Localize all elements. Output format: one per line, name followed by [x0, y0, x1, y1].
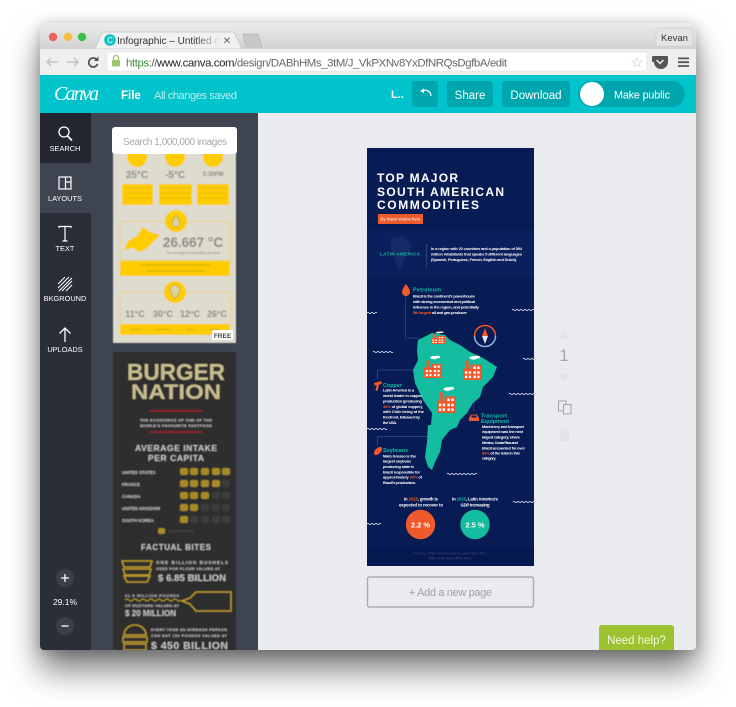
section: copper: the USA. [383, 420, 397, 425]
Latin America intro band [380, 236, 522, 270]
section: transport equipment: Equipment [481, 419, 509, 425]
author tag [378, 214, 423, 224]
section: transport equipment: Machinery and transport [482, 424, 525, 429]
template thumbnail: burger nation: EVERY YEAR AN AVERAGE PERSON [151, 628, 227, 632]
need help button: Need help? [607, 635, 666, 647]
poster title [377, 174, 504, 209]
add a new page button: + Add a new page [409, 587, 492, 599]
browser window [40, 23, 696, 650]
navigation icons [47, 56, 98, 67]
browser toolbar [46, 49, 689, 72]
section: transport equipment: Transport [481, 414, 507, 420]
icon: car [469, 414, 479, 421]
template thumbnail: burger nation: BURGER [127, 359, 225, 385]
section: transport equipment: Brazil accounted for over [482, 446, 525, 450]
map: South America [413, 333, 497, 470]
template thumbnail: burger nation: AVERAGE INTAKE [135, 443, 217, 453]
text tool [56, 226, 75, 253]
free badge: FREE [214, 333, 232, 340]
factory icons [424, 331, 482, 413]
template thumbnail: burger nation: NATION [131, 381, 221, 404]
user button: Kevan [661, 33, 688, 44]
section: transport equipment: 86% of the total in this [482, 450, 521, 456]
source footer: Source: http://www.source.com/404-4f4c- [413, 552, 489, 556]
region description [431, 246, 523, 262]
search tool [50, 127, 80, 153]
copy page icon [558, 401, 571, 414]
stat: GDP 2.5% [452, 496, 499, 539]
section: petroleum: 5th largest oil and gas producer [413, 310, 467, 315]
address bar: ☆ [630, 54, 644, 72]
section: copper: Latin America is a [383, 388, 415, 392]
section: transport equipment [469, 414, 525, 460]
template thumbnail: burger nation: CAN EAT 150 POUNDS VALUED AT [151, 634, 228, 638]
uploads tool [47, 328, 83, 354]
template thumbnail: burger nation: CANADA [122, 494, 141, 499]
stat: growth 2.2%: 2.2 % [411, 520, 430, 530]
save status: All changes saved [154, 90, 237, 102]
download button [502, 81, 570, 107]
stat: growth 2.2% [399, 496, 443, 539]
template thumbnail: burger nation: SOUTH KOREA [122, 518, 154, 523]
section: transport equipment: equipment was the next [482, 429, 524, 434]
template thumbnail: burger nation: $ 6.85 BILLION [158, 573, 226, 584]
template thumbnail: weather: 25°C [126, 170, 148, 181]
search images field [112, 127, 237, 154]
region description: million inhabitants that speaks 5 different languages [431, 252, 522, 256]
Canva logo: Canva [54, 83, 99, 105]
author tag: By Insert source here [380, 216, 421, 222]
menu icon [678, 58, 689, 67]
layouts tool: LAYOUTS [48, 194, 82, 203]
section: soybeans: Brazil responsible for [383, 470, 420, 474]
active browser tab: ✕ [223, 36, 231, 47]
stat: GDP 2.5%: 2.5 % [465, 520, 485, 530]
template thumbnail: burger nation: ONE BILLION BUSHELS [156, 560, 228, 565]
share button [447, 81, 493, 107]
region description: In a region with 20 countries and a population of 594 [431, 246, 523, 251]
source footer [367, 547, 534, 566]
section: petroleum: Brazil is the continent's powerhouse [413, 294, 476, 298]
poster title: TOP MAJOR [377, 171, 458, 185]
template thumbnail: weather: 26.667 °C [163, 235, 223, 250]
section: petroleum [402, 284, 480, 315]
section: soybeans: approximately 38% of [383, 474, 423, 480]
section: copper: Copper [383, 383, 403, 389]
section: soybeans: Brazil's production. [383, 480, 416, 485]
section: copper: production (producing [383, 398, 423, 404]
zoom in button [56, 569, 74, 587]
make public toggle [578, 81, 685, 107]
uploads tool: UPLOADS [47, 345, 83, 354]
section: petroleum: influence in the region, and potentially [413, 304, 480, 310]
layouts tool [48, 177, 82, 203]
icon: soybean [372, 445, 384, 457]
background tool [44, 277, 86, 303]
undo button [412, 81, 438, 107]
section: transport equipment: Mexico, Costa Rica and [482, 440, 519, 445]
browser tab bar [40, 28, 696, 49]
icon: hammer [374, 381, 382, 391]
section: soybeans: producing state in [383, 464, 415, 469]
file menu: File [121, 90, 141, 102]
section: soybeans [372, 445, 423, 485]
stat: GDP 2.5%: In 2016, Latin America's [452, 496, 499, 502]
template thumbnail: burger nation: $ 20 MILLION [125, 609, 176, 618]
new tab button [243, 34, 262, 47]
template thumbnail: burger nation: 41.5 MILLION POUNDS [125, 594, 179, 598]
section: soybeans: largest soybean [383, 458, 412, 464]
faint continent [390, 236, 412, 270]
make public toggle: Make public [614, 90, 671, 102]
compass icon [474, 326, 496, 346]
source footer: 4f4c-4f4c-4f4c-4f4c-4f4c/ [428, 556, 473, 560]
need help button [599, 625, 674, 650]
template thumbnail: burger nation: $ 450 BILLION [151, 640, 228, 652]
section: soybeans: Soybeans [383, 448, 408, 454]
leader lines [378, 297, 474, 446]
template thumbnail: weather: 30°C [153, 309, 174, 319]
template thumbnail: weather: 12°C [180, 309, 201, 319]
address bar: https://www.canva.com/design/DABhHMs_3tM/J_VkPXNv8YxDfNRQsDgfbA/edit [126, 58, 508, 70]
infographic page [367, 148, 534, 566]
download button: Download [510, 90, 562, 102]
template thumbnail: burger nation: UNITED STATES [122, 470, 156, 475]
text tool: TEXT [56, 244, 75, 253]
Canva top bar [40, 75, 696, 113]
add a new page button [368, 577, 534, 607]
share button: Share [455, 90, 485, 102]
traffic light buttons [49, 33, 86, 41]
template thumbnail: burger nation [113, 352, 236, 652]
active browser tab [95, 32, 244, 49]
template thumbnail: burger nation: USED FOR FLOUR VALUED AT [156, 567, 221, 571]
section: copper: 40% of global copper), [383, 404, 423, 409]
left sidebar [40, 113, 258, 650]
template thumbnail: weather: 11°C [125, 309, 145, 319]
search images field: Search 1,000,000 images [123, 137, 227, 148]
section: transport equipment: category. [482, 456, 496, 460]
stat: growth 2.2%: expected to recover to [399, 502, 443, 508]
stat: growth 2.2%: In 2015, growth is [404, 496, 439, 502]
poster title: SOUTH AMERICAN [377, 185, 504, 199]
section: copper: with Chile being at the [382, 409, 425, 414]
section: petroleum: Petroleum [413, 288, 441, 294]
section: copper [374, 381, 425, 425]
active browser tab: C [107, 36, 113, 45]
template thumbnail: weather: 26°C [207, 309, 228, 319]
section: soybeans: Mato Grosso is the [383, 454, 417, 458]
template thumbnail: burger nation: PER CAPITA [148, 453, 204, 463]
poster title: COMMODITIES [377, 198, 479, 212]
delete page icon [560, 428, 569, 441]
template thumbnail: weather: The average temperature per year [166, 251, 221, 255]
zoom level: 29.1% [53, 597, 77, 607]
region name: LATIN AMERICA [380, 252, 421, 258]
section: copper: world leader in copper [382, 393, 422, 398]
pocket icon [652, 56, 668, 69]
icon: oil drop [402, 284, 410, 296]
section: copper: forefront, followed by [383, 414, 421, 420]
wave decorations [367, 309, 534, 525]
stat: GDP 2.5%: GDP increasing [460, 502, 490, 508]
page down arrow [557, 374, 571, 382]
region description: (Spanish, Portuguese, French, English and Dutch). [431, 257, 517, 262]
template thumbnail: burger nation: OF MUSTARD VALUED AT [125, 604, 180, 608]
page controls [557, 331, 571, 441]
truncated title: L.. [391, 89, 404, 101]
section: transport equipment: largest category, where [482, 434, 521, 440]
user button [656, 28, 693, 46]
free badge [212, 330, 233, 340]
section: petroleum: with strong economical and political [412, 299, 475, 304]
template thumbnail: burger nation: UNITED KINGDOM [122, 506, 160, 511]
zoom out button [56, 617, 74, 635]
template thumbnail: weather [113, 140, 236, 343]
background tool: BKGROUND [44, 294, 86, 303]
template thumbnail: weather: -5°C [165, 170, 185, 181]
search tool: SEARCH [50, 144, 80, 153]
template thumbnail: burger nation: THE ECONOMICS OF ONE OF THE [140, 418, 212, 422]
active browser tab: Infographic – Untitled design [117, 36, 244, 47]
template thumbnail: burger nation: WORLD'S FAVOURITE FASTFOOD [140, 423, 212, 428]
template thumbnail: burger nation: FACTUAL BITES [141, 543, 212, 552]
template thumbnail: burger nation: FRANCE [122, 482, 140, 487]
page up arrow [557, 331, 571, 339]
address bar [107, 52, 647, 72]
page number: 1 [559, 346, 569, 365]
template thumbnail: weather: 3:30PM [202, 172, 224, 178]
